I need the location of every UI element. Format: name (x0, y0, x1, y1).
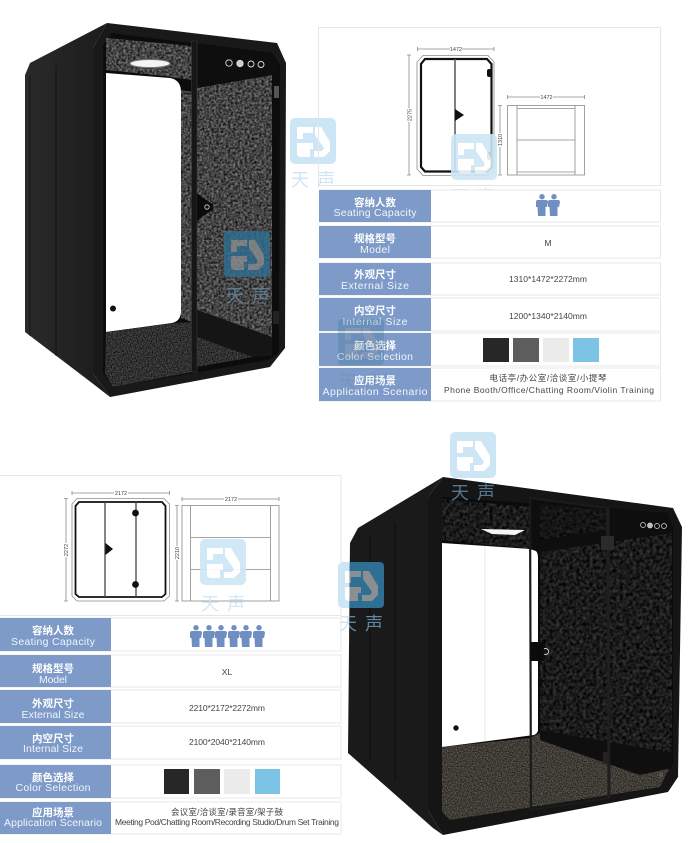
booth M skirting (197, 310, 272, 357)
booth M right carpet (197, 337, 253, 367)
color swatches (164, 769, 280, 794)
table: M specifications (319, 190, 660, 401)
booth M back wall (106, 73, 181, 332)
row: application scenario: 电话亭/办公室/洽谈室/小提琴 (490, 373, 607, 383)
color swatches (483, 338, 599, 362)
watermark over booth M: 天声 (226, 286, 278, 306)
row: seating capacity: 容纳人数 (32, 624, 74, 637)
watermark over XL drawings: 天声 (201, 594, 253, 614)
booth M control icons (226, 60, 264, 68)
row: model: Model (39, 674, 67, 686)
row: color selection: Color Selection (16, 782, 91, 794)
front elevation XL: 2172 (115, 491, 127, 497)
icon: six people (190, 625, 265, 647)
row: color selection (319, 333, 660, 366)
row: model: XL (222, 667, 232, 677)
row: external size: External Size (341, 280, 409, 292)
watermark over XL booth side: 天声 (339, 614, 391, 634)
panel: M dimension drawings (318, 28, 660, 207)
row: external size: 2210*2172*2272mm (189, 703, 265, 713)
booth XL door frame (530, 498, 609, 810)
front elevation M (406, 46, 494, 176)
booth M right felt wall (197, 75, 272, 337)
booth XL ceiling felt (442, 499, 530, 549)
watermark over M table (338, 319, 391, 392)
row: seating capacity: Seating Capacity (334, 207, 417, 219)
booth photo: XL model (348, 477, 682, 835)
booth XL back wall (442, 543, 538, 747)
row: internal size: 内空尺寸 (32, 732, 74, 745)
booth M lower hinge (273, 311, 279, 324)
watermark between sections (450, 432, 496, 478)
hinges XL (132, 510, 139, 516)
booth XL corner button (659, 773, 663, 777)
watermark over XL drawings (200, 539, 253, 614)
watermark over M drawings (451, 134, 503, 207)
side elevation XL (174, 496, 279, 601)
row: application scenario (319, 368, 660, 401)
row: seating capacity (0, 618, 341, 651)
row: external size: External Size (22, 709, 85, 721)
watermark over M drawings: 天声 (451, 187, 503, 207)
row: seating capacity: 容纳人数 (354, 196, 396, 209)
row: internal size: 2100*2040*2140mm (189, 737, 265, 747)
row: seating capacity: Seating Capacity (11, 636, 96, 648)
row: external size: 外观尺寸 (354, 268, 396, 281)
booth M right ceiling (197, 43, 279, 88)
booth XL side wall (348, 477, 443, 835)
row: seating capacity (319, 190, 660, 222)
watermark left of M spec panel (290, 118, 343, 190)
row: color selection (0, 765, 341, 798)
side elevation M: 1310 (498, 134, 504, 146)
booth XL door handle (530, 642, 545, 661)
watermark text on XL booth top: 天声 (451, 483, 503, 503)
booth photo: M model (25, 23, 286, 397)
booth M interior base (103, 33, 280, 387)
panel: XL dimension drawings (0, 476, 341, 616)
row: model (0, 655, 341, 687)
icon: two people (536, 194, 560, 216)
booth M left felt strip (181, 90, 192, 322)
booth XL front frame (428, 477, 682, 835)
hinges M (487, 69, 492, 77)
side elevation M: 1472 (540, 95, 553, 101)
row: internal size: Internal Size (23, 743, 83, 755)
booth M upper hinge (274, 86, 279, 98)
row: internal size: Internal Size (342, 316, 408, 328)
booth M ceiling felt (106, 38, 192, 80)
row: external size: 外观尺寸 (32, 697, 74, 710)
row: color selection: 颜色选择 (354, 339, 396, 352)
booth XL hinge (601, 536, 614, 550)
watermark left of XL booth on white (338, 562, 391, 634)
booth XL carpet (442, 733, 672, 820)
row: internal size (0, 726, 341, 759)
row: external size: 1310*1472*2272mm (509, 274, 587, 284)
row: color selection: 颜色选择 (32, 771, 74, 784)
door handle marker XL (106, 543, 113, 555)
booth M ceiling light (130, 60, 170, 68)
row: internal size: 内空尺寸 (354, 304, 396, 317)
watermark over M table: 天声 (339, 372, 391, 392)
booth M door handle (197, 193, 213, 221)
side elevation XL: 2172 (225, 497, 237, 503)
booth XL skirting (540, 730, 672, 775)
front elevation M: 1472 (450, 47, 462, 53)
side elevation M (497, 94, 584, 175)
row: application scenario: Meeting Pod/Chatting Room/Recording Studio/Drum Set Training (115, 817, 339, 827)
row: model (319, 226, 660, 258)
booth XL felt wall (540, 533, 672, 753)
row: model: Model (360, 244, 390, 256)
booth XL ceiling light (481, 529, 525, 535)
table: XL specifications (0, 618, 341, 834)
row: application scenario (0, 802, 341, 834)
row: model: 规格型号 (32, 662, 74, 675)
row: application scenario: 应用场景 (32, 806, 74, 819)
booth M door post (192, 41, 197, 372)
row: color selection: Color Selection (337, 351, 413, 363)
front elevation M: 2275 (408, 109, 414, 121)
booth M wall dot (110, 306, 116, 312)
row: application scenario: Application Scenario (4, 817, 102, 829)
front elevation XL: 2272 (64, 544, 70, 556)
door handle marker M (455, 109, 464, 121)
booth XL control icons (640, 522, 666, 528)
watermark over booth M (224, 231, 278, 306)
booth M carpet (105, 322, 192, 387)
row: application scenario: Application Scenario (322, 386, 428, 398)
booth XL ceiling right (530, 499, 673, 552)
row: model: M (544, 238, 552, 248)
row: internal size: 1200*1340*2140mm (509, 311, 587, 321)
side elevation XL: 2210 (175, 547, 181, 559)
row: external size (0, 690, 341, 723)
booth M side wall (25, 23, 110, 397)
watermark left of XL booth on white: 天声 (339, 614, 391, 634)
front elevation XL (63, 490, 170, 601)
row: external size (319, 263, 660, 295)
booth XL interior base (442, 497, 673, 820)
booth XL bottom latch (603, 752, 608, 764)
watermark left of M spec panel: 天声 (291, 170, 343, 190)
booth XL wall dot (453, 725, 459, 731)
watermark over XL booth side (349, 562, 384, 632)
booth M front frame (93, 23, 286, 397)
row: model: 规格型号 (354, 232, 396, 245)
row: application scenario: 应用场景 (354, 374, 396, 387)
row: internal size (319, 298, 660, 331)
row: application scenario: 会议室/洽谈室/录音室/架子鼓 (171, 807, 283, 817)
row: application scenario: Phone Booth/Office/Chatting Room/Violin Training (444, 385, 654, 395)
